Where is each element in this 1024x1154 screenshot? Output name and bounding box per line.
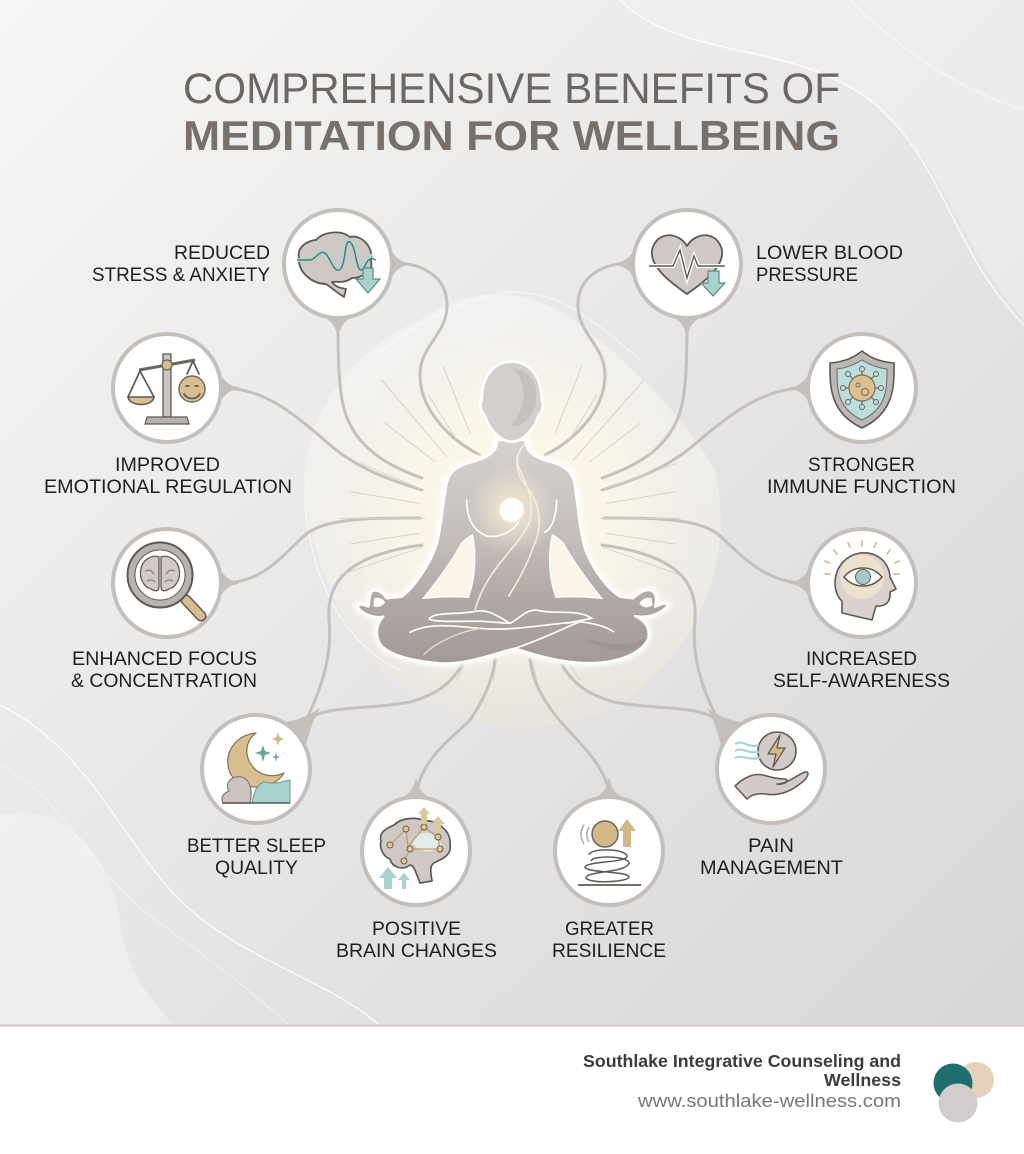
chest glow	[467, 465, 557, 555]
arm-torso gap right	[550, 535, 602, 598]
label: & CONCENTRATION	[71, 670, 257, 692]
label	[756, 242, 903, 286]
footer organization name: Wellness	[824, 1070, 901, 1090]
radiating rays	[340, 367, 680, 680]
connector flare	[215, 364, 239, 412]
label: IMPROVED	[115, 454, 220, 476]
label: PAIN	[748, 835, 794, 857]
connector flare left	[615, 240, 639, 288]
head	[480, 362, 543, 442]
icon: spring and ball	[555, 797, 663, 905]
benefit: greater resilience	[552, 779, 666, 962]
meditating figure	[357, 362, 668, 664]
mudra hands	[373, 598, 653, 607]
arm-torso gap left	[423, 535, 475, 598]
icon: brain wave	[284, 210, 392, 318]
icon: shield with virus	[808, 334, 916, 442]
icon: brain with network	[362, 797, 470, 905]
connector lines	[222, 263, 806, 797]
benefit: pain management	[700, 708, 843, 879]
icon: head with eye	[808, 529, 916, 637]
label	[767, 454, 956, 498]
label	[71, 648, 257, 692]
label: RESILIENCE	[552, 940, 666, 962]
label: BRAIN CHANGES	[336, 940, 497, 962]
label: INCREASED	[806, 648, 917, 670]
label	[336, 918, 497, 962]
label: REDUCED	[174, 242, 270, 264]
benefit: immune function	[767, 334, 956, 498]
label: MANAGEMENT	[700, 857, 843, 879]
figure body	[357, 440, 668, 664]
icon: balance scale	[113, 334, 221, 442]
label: IMMUNE FUNCTION	[767, 476, 956, 498]
title: MEDITATION FOR WELLBEING	[183, 112, 840, 159]
label: SELF-AWARENESS	[773, 670, 950, 692]
benefit: enhanced focus	[71, 529, 257, 692]
connector flare	[215, 559, 239, 607]
label: GREATER	[565, 918, 654, 940]
label: POSITIVE	[372, 918, 461, 940]
heart light	[500, 498, 524, 522]
label: LOWER BLOOD	[756, 242, 903, 264]
benefit: lower blood pressure	[615, 210, 903, 336]
icon: moon and pillow	[202, 715, 310, 823]
connector flare	[392, 779, 440, 803]
label: QUALITY	[215, 857, 298, 879]
benefit: emotional regulation	[44, 334, 292, 498]
benefit: self-awareness	[773, 529, 950, 692]
connector flare right	[386, 240, 410, 288]
label	[92, 242, 270, 286]
label	[773, 648, 950, 692]
connector flare down	[314, 312, 362, 336]
connector flare	[790, 364, 814, 412]
label: BETTER SLEEP	[187, 835, 326, 857]
label: STRONGER	[808, 454, 915, 476]
benefit: better sleep	[187, 708, 326, 879]
label	[187, 835, 326, 879]
label: EMOTIONAL REGULATION	[44, 476, 292, 498]
connector flare	[286, 708, 320, 745]
footer logo	[934, 1062, 994, 1122]
label	[700, 835, 843, 879]
icon: heart with pulse	[633, 210, 741, 318]
label	[44, 454, 292, 498]
label: STRESS & ANXIETY	[92, 264, 270, 286]
footer organization name	[583, 1051, 901, 1090]
icon: hand with pain bolt	[717, 715, 825, 823]
label: PRESSURE	[756, 264, 858, 286]
footer panel	[0, 1024, 1024, 1154]
footer website: www.southlake-wellness.com	[637, 1091, 901, 1111]
connector flare	[585, 779, 633, 803]
footer organization name: Southlake Integrative Counseling and	[583, 1051, 901, 1071]
flowing lines	[475, 443, 539, 610]
title: COMPREHENSIVE BENEFITS OF	[183, 65, 840, 113]
connector flare	[790, 559, 814, 607]
icon: magnifying glass with brain	[113, 529, 221, 637]
figure glow	[357, 440, 668, 664]
central glow blob	[305, 292, 721, 726]
knee shade	[583, 637, 648, 651]
title	[183, 65, 840, 159]
connector flare down	[663, 312, 711, 336]
label: ENHANCED FOCUS	[72, 648, 257, 670]
benefit: reduced stress	[92, 210, 410, 336]
connector flare	[707, 708, 741, 745]
benefit: positive brain changes	[336, 779, 497, 962]
label	[552, 918, 666, 962]
